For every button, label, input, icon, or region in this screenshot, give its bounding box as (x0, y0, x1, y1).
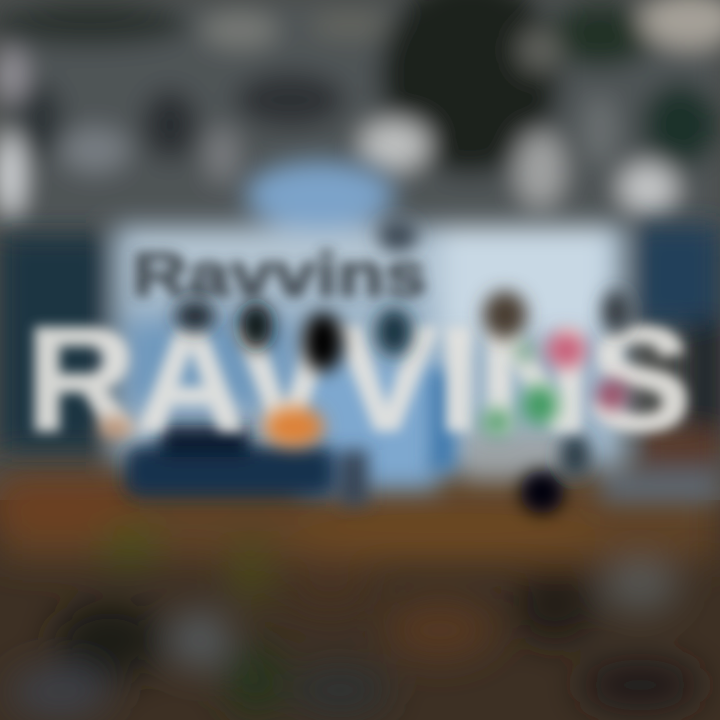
icon: colourful accents (97, 332, 627, 447)
panel: building and vehicle body (0, 161, 720, 502)
panel: tree canopy (0, 0, 720, 235)
title: large lettering: RAVVINS (26, 297, 691, 462)
panel: ground vegetation (0, 470, 720, 718)
title: small heading: Ravvins (132, 241, 427, 310)
panel: vehicle underside and wheels (125, 370, 590, 514)
icon: dark figures between the letters (175, 220, 630, 372)
